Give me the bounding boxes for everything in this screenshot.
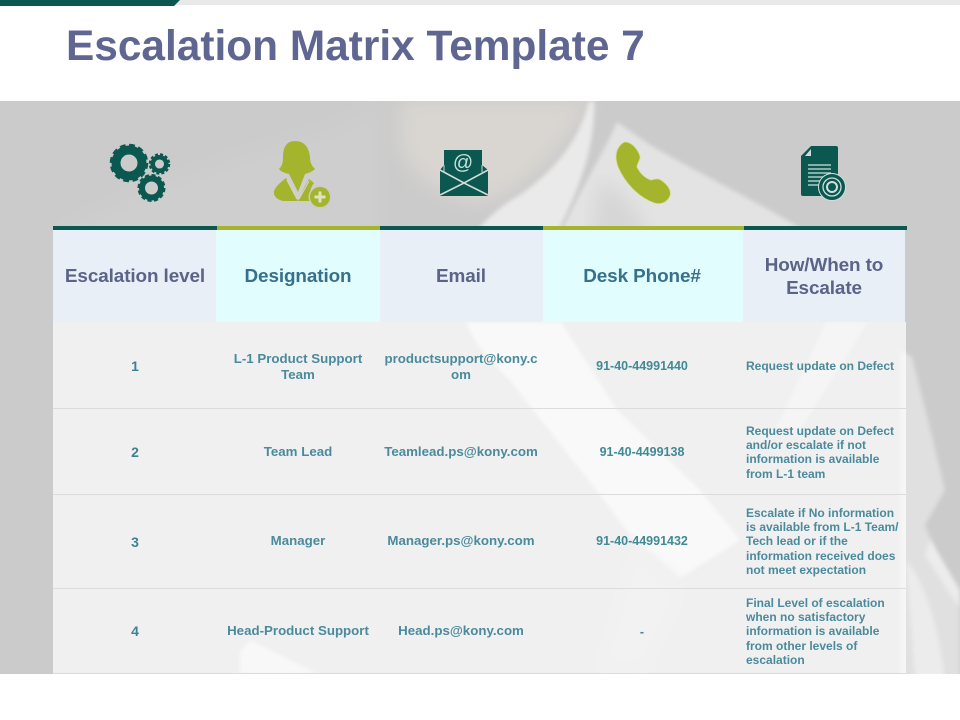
row 2 (131, 424, 894, 481)
row 1: productsupport@kony.c (384, 351, 538, 366)
row 3: Tech lead or if the (746, 534, 848, 548)
row 1: 91-40-44991440 (596, 359, 688, 373)
header cell: How/When to Escalate: Escalate (786, 278, 862, 299)
row 2: and/or escalate if not (746, 438, 866, 452)
row 4: - (640, 625, 644, 639)
header cell: Email: Email (436, 266, 486, 287)
row 1 (131, 351, 894, 382)
row 2: from L-1 team (746, 467, 825, 481)
row 4: 4 (131, 623, 139, 639)
row 3: not meet expectation (746, 563, 866, 577)
row 3: is available from L-1 Team/ (746, 520, 899, 534)
row 2: Teamlead.ps@kony.com (384, 444, 538, 459)
header bars (53, 226, 907, 230)
icon: gears (110, 144, 170, 202)
row 4: when no satisfactory (746, 610, 865, 624)
icon: email envelope: @ (453, 152, 473, 174)
row 1: L-1 Product Support (234, 351, 362, 366)
row 4: from other levels of (746, 639, 857, 653)
header cell: Designation: Designation (244, 266, 352, 287)
row 3: Escalate if No information (746, 506, 894, 520)
row 2: 2 (131, 444, 139, 460)
row 1: om (451, 367, 471, 382)
icon: email envelope (440, 150, 488, 196)
row 2: 91-40-4499138 (600, 445, 684, 459)
header cell: Desk Phone: Desk Phone# (583, 266, 701, 287)
icon: businesswoman with plus (274, 141, 330, 207)
header cell: Escalation level: Escalation level (65, 266, 205, 287)
row 3: Manager (271, 533, 325, 548)
row 1: 1 (131, 358, 139, 374)
row 3: 3 (131, 534, 139, 550)
background photo of man in suit (0, 101, 960, 674)
header cell: Designation (216, 230, 380, 322)
row 4: Head-Product Support (227, 623, 369, 638)
row 3: Manager.ps@kony.com (387, 533, 535, 548)
row 1: Request update on Defect (746, 359, 894, 373)
row 3: 91-40-44991432 (596, 534, 688, 548)
icon: telephone handset (616, 142, 671, 204)
row 3 (131, 506, 899, 577)
header cell: Desk Phone (543, 230, 743, 322)
row 2: Request update on Defect (746, 424, 894, 438)
row 4: Head.ps@kony.com (398, 623, 524, 638)
row 1: Team (281, 367, 315, 382)
icon: document with target (801, 146, 846, 201)
top accent bar (0, 0, 960, 6)
row 4: Final Level of escalation (746, 596, 885, 610)
row 4 (131, 596, 885, 667)
row 4: information is available (746, 624, 879, 638)
row 4: escalation (746, 653, 805, 667)
row 2: Team Lead (264, 444, 332, 459)
header cell: How/When to Escalate (743, 230, 905, 322)
title: Escalation Matrix Template 7 (66, 22, 645, 69)
table body rows translucent panel (53, 322, 906, 673)
header cell: How/When to Escalate: How/When to (765, 255, 883, 276)
row 2: information is available (746, 452, 879, 466)
row 3: information received does (746, 549, 895, 563)
header cell: Email (380, 230, 543, 322)
header cell: Escalation level (53, 230, 216, 322)
